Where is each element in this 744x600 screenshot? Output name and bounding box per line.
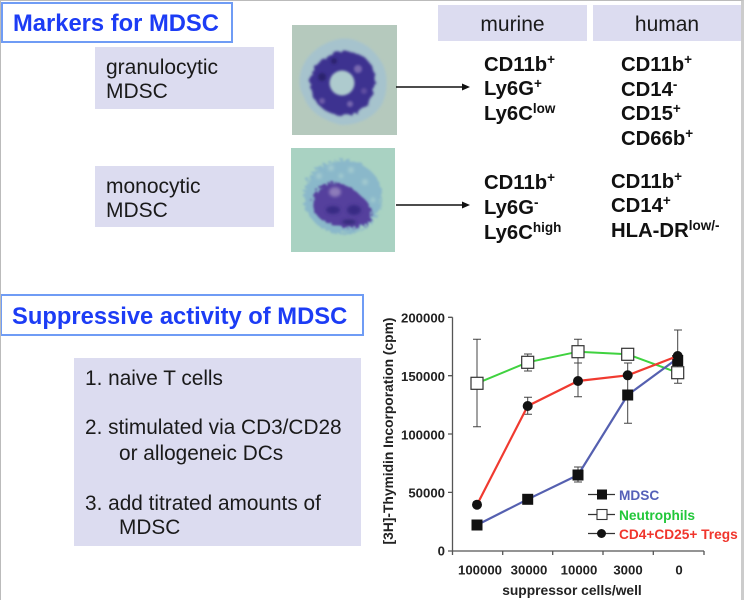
label: granulocytic MDSC: granulocytic [106,56,218,79]
x axis labels [458,562,683,598]
label: monocytic MDSC: MDSC [106,199,168,222]
series: MDSC [472,355,683,530]
y axis labels: 0 [438,544,445,558]
markers: granulocytic human: CD66b+ [621,126,693,150]
label: monocytic MDSC: monocytic [106,175,201,198]
step 2: or allogeneic DCs [119,442,283,464]
y axis labels [401,311,445,558]
markers: monocytic human: CD11b+ [611,169,682,193]
label: granulocytic MDSC: MDSC [106,80,168,103]
label: granulocytic MDSC [95,47,274,109]
axes [448,317,704,555]
y axis labels: 150000 [401,369,445,384]
markers: granulocytic human [621,52,693,150]
y axis labels: 50000 [408,486,445,500]
legend: CD4+CD25+ Tregs [619,527,738,542]
markers: granulocytic human: CD11b+ [621,52,692,76]
legend [588,488,738,542]
step 3: MDSC [119,516,180,539]
markers: monocytic murine: Ly6Chigh [484,220,561,244]
x axis labels: 10000 [561,562,597,578]
panel: protocol steps [74,358,361,546]
title: markers for MDSC [1,2,233,43]
icon: granulocyte micrograph [292,25,397,135]
step 2 [85,416,342,464]
label: monocytic MDSC [95,166,274,227]
header: human: human [635,13,699,36]
series: CD4+CD25+ Tregs [472,351,683,510]
step 2: 2. stimulated via CD3/CD28 [85,416,342,439]
y axis title: [3H]-Thymidin Incorporation (cpm) [381,318,396,544]
title: suppressive activity of MDSC: Suppressive activity of MDSC [12,303,347,330]
y axis labels: 200000 [401,311,445,326]
header: human [593,5,741,41]
markers: granulocytic human: CD15+ [621,101,681,125]
title: suppressive activity of MDSC [0,294,364,336]
markers: monocytic human: CD14+ [611,193,671,217]
x axis labels: 30000 [511,562,547,578]
legend: Neutrophils [619,508,695,523]
step 3: 3. add titrated amounts of [85,492,321,514]
series: neutrophils [471,346,684,389]
x axis labels: 0 [675,562,683,578]
icon: monocyte micrograph [291,148,395,252]
y axis labels: 100000 [401,428,445,442]
markers: granulocytic human: CD14- [621,77,677,101]
x axis labels: 100000 [458,562,502,578]
step 3 [85,492,321,539]
arrow: granulocytic to markers [396,84,470,90]
step 1: 1. naive T cells [85,367,223,390]
x axis labels: 3000 [613,562,643,578]
markers: monocytic human: HLA-DRlow/- [611,218,719,242]
title: markers for MDSC: Markers for MDSC [13,10,219,37]
markers: monocytic murine: Ly6G- [484,195,538,219]
header: murine: murine [480,13,545,36]
markers: monocytic murine [484,170,561,244]
markers: granulocytic murine [484,52,556,125]
error bars [473,330,682,482]
markers: granulocytic murine: CD11b+ [484,52,555,76]
x axis labels: suppressor cells/well [502,583,642,598]
header: murine [438,5,587,41]
chart: thymidin incorporation [381,311,738,598]
legend: MDSC [619,488,659,503]
arrow: monocytic to markers [396,202,470,208]
markers: granulocytic murine: Ly6G+ [484,76,542,100]
markers: monocytic murine: CD11b+ [484,170,555,194]
markers: granulocytic murine: Ly6Clow [484,101,555,125]
markers: monocytic human [611,169,719,242]
